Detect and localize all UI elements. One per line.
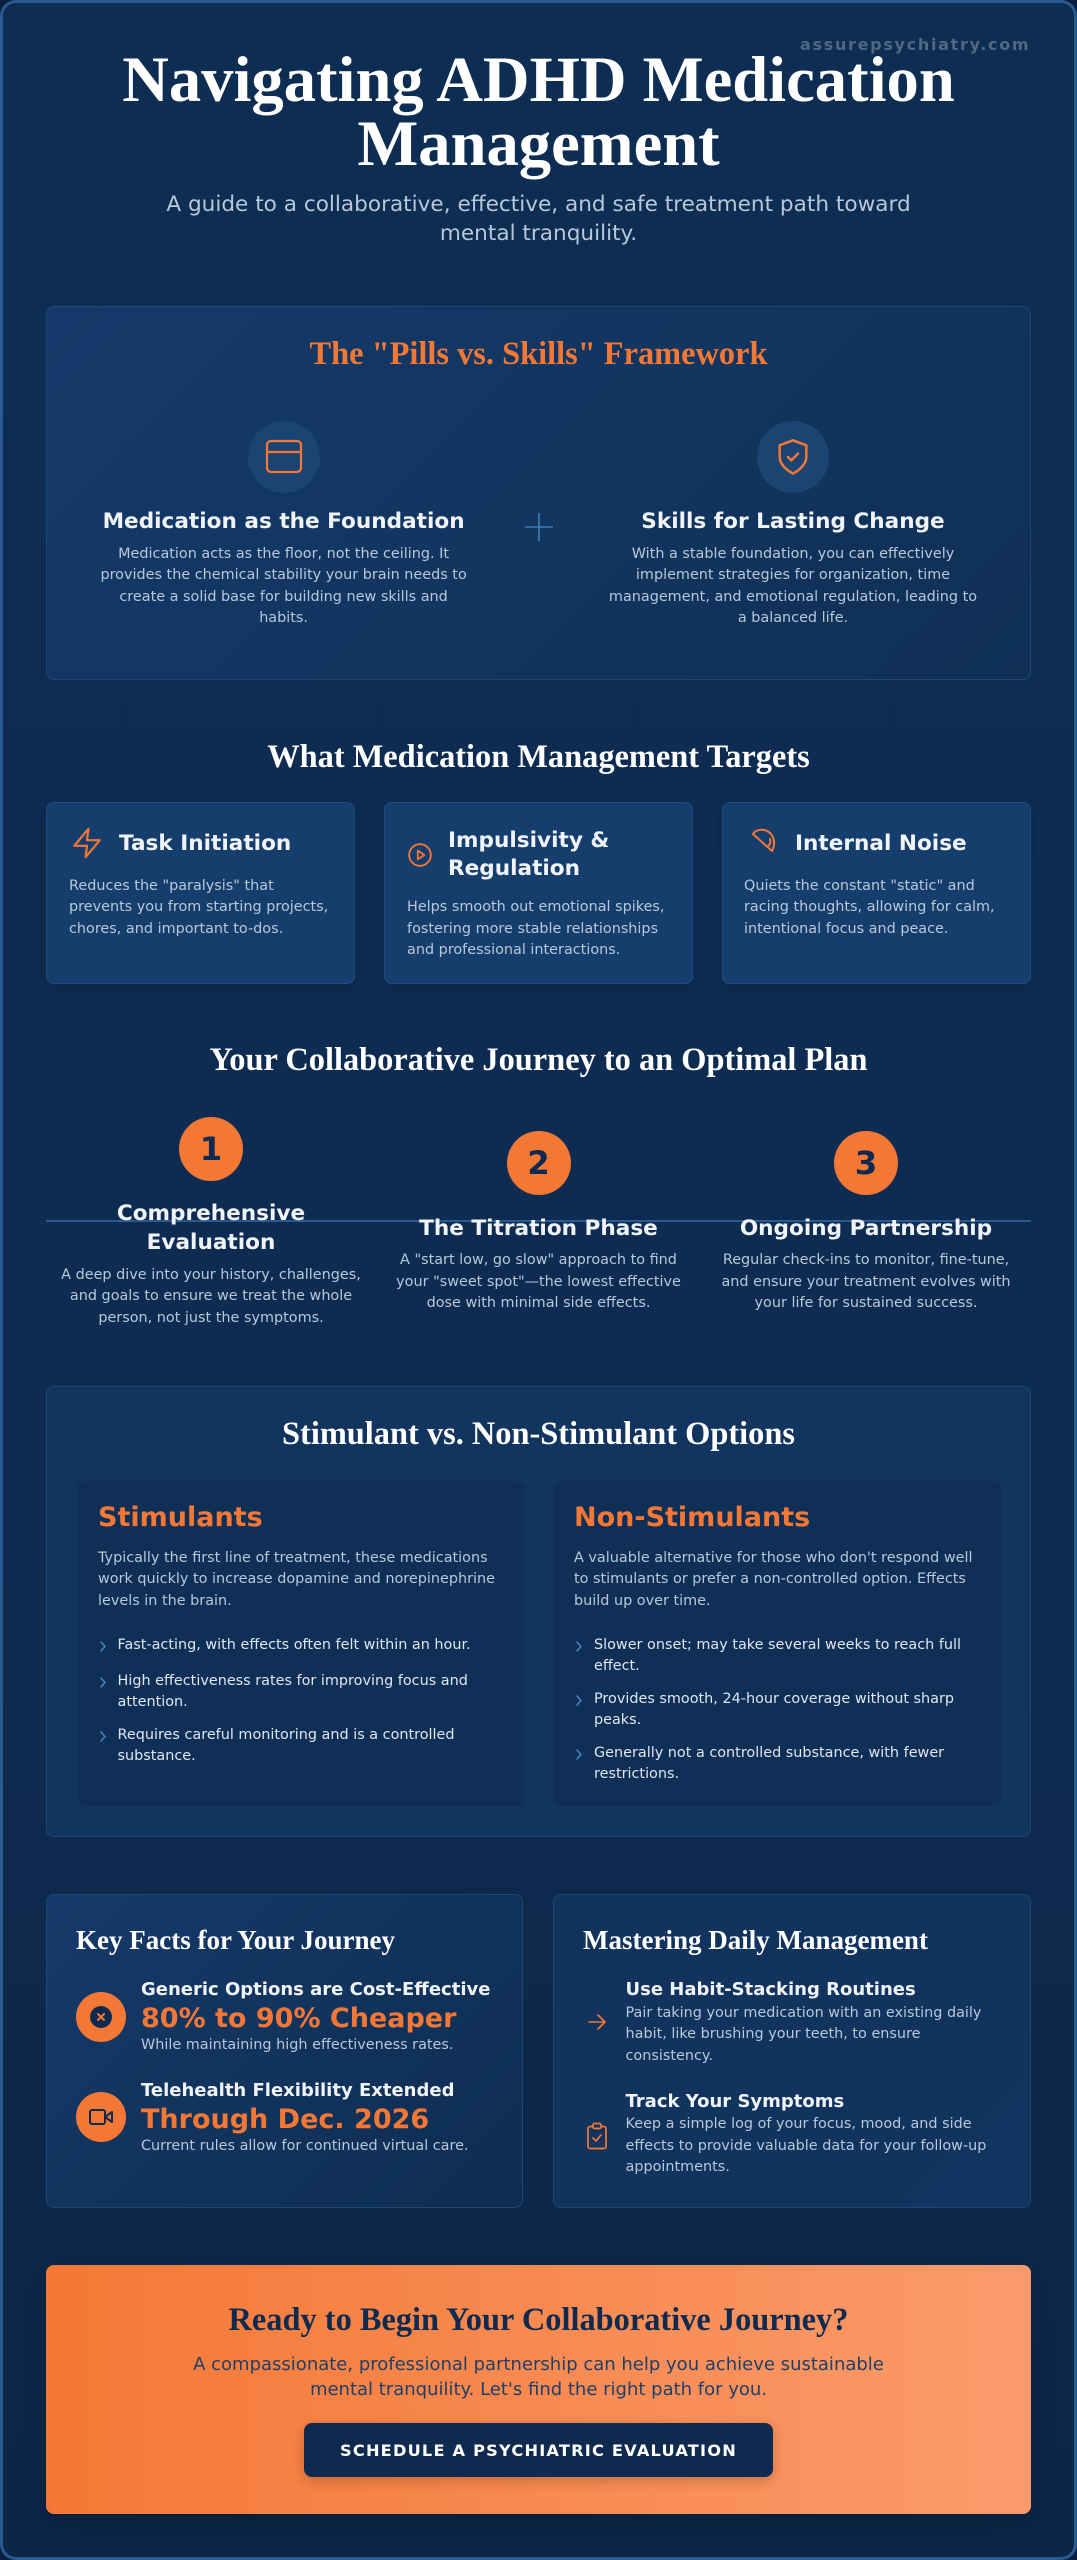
watermark: assurepsychiatry.com (800, 35, 1030, 54)
step 2 (396, 1131, 681, 1311)
tip text: consistency. (626, 2048, 713, 2064)
column text: work quickly to increase dopamine and norepinephrine (98, 1571, 495, 1587)
heading: comparison: Stimulant vs. Non-Stimulant Options (282, 1416, 795, 1452)
card: impulsivity (384, 802, 693, 984)
tip text: appointments. (626, 2159, 730, 2175)
heading: targets: What Medication Management Targets (267, 738, 810, 774)
card text: prevents you from starting projects, (69, 899, 328, 915)
feature text: medication: habits. (259, 610, 308, 626)
title: Management (357, 107, 720, 179)
step number: 2 (527, 1144, 550, 1182)
column text: A valuable alternative for those who don't respond well (574, 1550, 972, 1566)
icon: lightning (73, 828, 101, 858)
feature text: skills (609, 546, 977, 626)
fact title: Generic Options are Cost-Effective (141, 1979, 490, 2000)
card text: Helps smooth out emotional spikes, (407, 899, 664, 915)
tip: symptoms (587, 2090, 986, 2175)
bullet 2: attention. (118, 1694, 188, 1710)
bullet 2 (100, 1672, 468, 1710)
step text: A "start low, go slow" approach to find (400, 1252, 677, 1268)
icon: medication foundation (248, 421, 320, 493)
fact: generic options (76, 1979, 490, 2053)
fact title: Telehealth Flexibility Extended (141, 2080, 454, 2101)
bullet 2 (576, 1690, 954, 1728)
call to action text: A compassionate, professional partnership can help you achieve sustainable (193, 2354, 884, 2375)
step title: The Titration Phase (419, 1216, 658, 1240)
feature text: skills: With a stable foundation, you can effectively (632, 546, 954, 562)
bullet 3: Generally not a controlled substance, with fewer (594, 1744, 944, 1760)
card text: and professional interactions. (407, 942, 620, 958)
step number: 3 (855, 1144, 877, 1182)
bullet 3: substance. (118, 1748, 196, 1764)
column: non-stimulants (554, 1481, 1001, 1806)
icon: arrow (588, 2014, 606, 2030)
card title: Internal Noise (795, 830, 967, 856)
tip text: effects to provide valuable data for your follow-up (626, 2138, 986, 2154)
card text: racing thoughts, allowing for calm, (744, 899, 995, 915)
tip text: Keep a simple log of your focus, mood, and side (626, 2116, 972, 2132)
step 3 (721, 1131, 1011, 1311)
call to action text: mental tranquility. Let's find the right path for you. (310, 2379, 767, 2400)
step text: your "sweet spot"—the lowest effective (396, 1274, 681, 1290)
title (122, 43, 955, 180)
heading: call to action: Ready to Begin Your Collaborative Journey? (229, 2302, 848, 2338)
bullet 3: restrictions. (594, 1766, 679, 1782)
subtitle: A guide to a collaborative, effective, and safe treatment path toward (166, 192, 911, 216)
heading: daily management: Mastering Daily Management (583, 1925, 928, 1955)
step text: Regular check-ins to monitor, fine-tune, (723, 1252, 1009, 1268)
card text: chores, and important to-dos. (69, 921, 283, 937)
bullet 2: Provides smooth, 24-hour coverage without sharp (594, 1690, 954, 1706)
icon: plus (525, 513, 553, 541)
card text (69, 878, 328, 937)
fact note: Current rules allow for continued virtual care. (141, 2138, 469, 2154)
subtitle: mental tranquility. (440, 220, 637, 246)
card text (407, 899, 664, 958)
tip title: Track Your Symptoms (626, 2090, 844, 2112)
bullet 3 (100, 1726, 455, 1764)
step number (179, 1117, 243, 1181)
card text (744, 878, 995, 937)
fact: telehealth (76, 2080, 469, 2154)
column: stimulants (77, 1481, 524, 1806)
title: Navigating ADHD Medication (122, 43, 955, 115)
bullet 1: effect. (594, 1658, 640, 1674)
feature title: medication: Medication as the Foundation (103, 508, 465, 534)
icon: pill (76, 1992, 126, 2042)
column text: levels in the brain. (98, 1593, 232, 1609)
feature text: medication: Medication acts as the floor, not the ceiling. It (118, 546, 449, 562)
column text: to stimulants or prefer a non-controlled option. Effects (574, 1571, 966, 1587)
panel: pills vs skills framework (46, 306, 1031, 680)
column title: Stimulants (98, 1502, 263, 1532)
step text: dose with minimal side effects. (427, 1295, 650, 1311)
card text: Reduces the "paralysis" that (69, 878, 274, 894)
column text (98, 1550, 495, 1609)
card title (448, 828, 609, 880)
panel: daily management (553, 1894, 1031, 2208)
panel: stimulant comparison (46, 1386, 1031, 1837)
feature text: medication: provides the chemical stability your brain needs to (100, 567, 467, 583)
bullet 3 (576, 1744, 944, 1782)
step text: and ensure your treatment evolves with (721, 1274, 1011, 1290)
icon: skills shield (757, 421, 829, 493)
bullet 2: High effectiveness rates for improving focus and (118, 1672, 468, 1688)
button (304, 2423, 773, 2477)
icon: video (76, 2092, 126, 2142)
step text: person, not just the symptoms. (98, 1310, 324, 1326)
bullet 3: Requires careful monitoring and is a controlled (118, 1726, 455, 1742)
feature text: medication: create a solid base for building new skills and (119, 589, 448, 605)
step text: and goals to ensure we treat the whole (70, 1288, 352, 1304)
call to action text (193, 2354, 884, 2400)
step 1 (61, 1117, 361, 1326)
tip text (626, 2004, 981, 2064)
panel: call to action (46, 2265, 1031, 2514)
step number: 1 (200, 1130, 222, 1168)
card title: Regulation (448, 856, 580, 880)
feature text: medication (100, 546, 467, 626)
tip: habit stacking (588, 1979, 981, 2064)
icon: clipboard (587, 2122, 607, 2150)
card: task initiation (46, 802, 355, 984)
step number (834, 1131, 898, 1195)
step title: Ongoing Partnership (740, 1216, 992, 1240)
card title: Impulsivity & (448, 828, 609, 852)
step text: your life for sustained success. (755, 1295, 977, 1311)
bullet 2: peaks. (594, 1712, 641, 1728)
heading: journey: Your Collaborative Journey to an Optimal Plan (209, 1042, 868, 1078)
step text (396, 1252, 681, 1311)
step text (721, 1252, 1011, 1311)
step title: Evaluation (147, 1230, 275, 1254)
icon: play circle (408, 843, 432, 867)
tip text (626, 2116, 986, 2175)
subtitle (166, 192, 911, 246)
heading: framework: The "Pills vs. Skills" Framework (310, 336, 767, 372)
panel: key facts (46, 1894, 523, 2208)
column text (574, 1550, 972, 1609)
step title: Comprehensive (117, 1201, 305, 1226)
card title: Task Initiation (119, 830, 291, 856)
step number (506, 1131, 570, 1195)
bullet 1: Fast-acting, with effects often felt within an hour. (118, 1636, 471, 1652)
feature text: skills: implement strategies for organization, time (636, 567, 950, 583)
feature text: skills: a balanced life. (738, 610, 848, 626)
tip text: habit, like brushing your teeth, to ensure (626, 2026, 920, 2042)
fact value: 80% to 90% Cheaper (141, 2003, 456, 2034)
card text: fostering more stable relationships (407, 921, 658, 937)
heading: key facts: Key Facts for Your Journey (76, 1925, 395, 1955)
fact value: Through Dec. 2026 (141, 2104, 429, 2135)
button: SCHEDULE A PSYCHIATRIC EVALUATION (340, 2441, 737, 2460)
icon: half leaf (752, 828, 776, 852)
fact note: While maintaining high effectiveness rates. (141, 2037, 453, 2053)
card: internal noise (722, 802, 1031, 984)
bullet 1 (576, 1636, 961, 1674)
feature text: skills: management, and emotional regulation, leading to (609, 589, 977, 605)
card text: intentional focus and peace. (744, 921, 948, 937)
bullet 1: Slower onset; may take several weeks to reach full (594, 1636, 961, 1652)
column text: Typically the first line of treatment, these medications (98, 1550, 488, 1566)
step text: A deep dive into your history, challenges, (61, 1267, 361, 1283)
tip title: Use Habit-Stacking Routines (626, 1979, 916, 2000)
step text (61, 1267, 361, 1326)
column title: Non-Stimulants (574, 1502, 810, 1532)
column text: build up over time. (574, 1593, 711, 1609)
card text: Quiets the constant "static" and (744, 878, 975, 894)
feature title: skills: Skills for Lasting Change (641, 508, 945, 534)
tip text: Pair taking your medication with an existing daily (626, 2004, 981, 2020)
step title (117, 1201, 305, 1254)
